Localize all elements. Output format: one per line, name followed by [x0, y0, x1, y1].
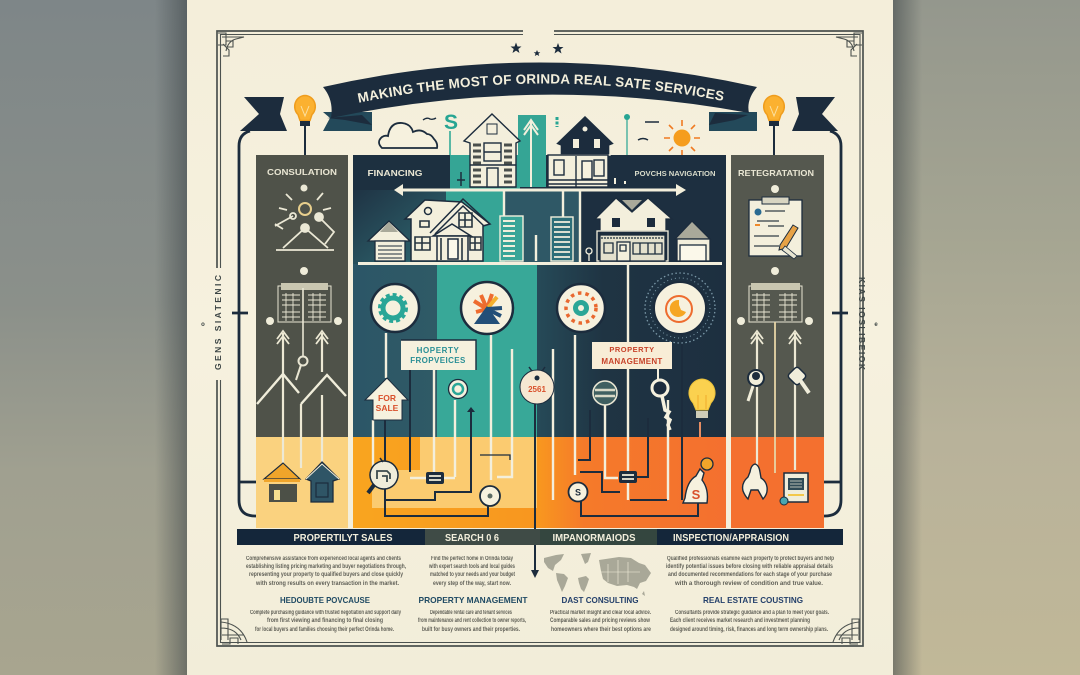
side label left [201, 275, 223, 370]
icon: chip left [426, 472, 444, 484]
sign: property management [592, 342, 672, 369]
bar label: inspection: INSPECTION/APPRAISION [673, 533, 789, 544]
icon: target circle [645, 273, 715, 343]
arrow: horizontal double arrow [394, 184, 686, 196]
side label right: e [874, 322, 878, 328]
right building with arrows [737, 267, 813, 473]
divider bar [358, 262, 722, 265]
icon: striped circle [593, 381, 617, 405]
icon: cloud [379, 123, 437, 148]
icon: s coin [568, 482, 588, 502]
icon: mid left house [405, 199, 490, 261]
text block: inspection: Qualified professionals examine each property to protect buyers and help [667, 556, 834, 562]
icon: teal tower [500, 216, 523, 261]
panel: consultation [256, 155, 348, 528]
icon: plug tag [366, 457, 402, 493]
icon: teal pin [557, 114, 630, 155]
text block: best consulting: homeowners where their best options are [551, 627, 652, 633]
sign: property services: HOPERTY [417, 346, 459, 355]
badge: center date: 2561 [528, 385, 546, 394]
text block: absolute purchase: for local buyers and families choosing their perfect Orinda home. [255, 627, 394, 633]
vertical arrows in teal column [504, 120, 580, 263]
title banner [323, 62, 757, 131]
text block: real estate consulting: Each client receives market research and investment planning [670, 618, 810, 624]
icon: big key [652, 369, 670, 430]
text block: real estate consulting: Consultants provide strategic guidance and a plan to meet your goals. [675, 610, 829, 616]
right banner flag and connector [758, 97, 848, 516]
text block: property management: Dependable rental care and tenant services [430, 610, 512, 616]
panel: retegration [731, 155, 824, 528]
text block: inspection: with a thorough review of condition and true value. [674, 581, 823, 587]
text block: best consulting: Comparable sales and pricing reviews show [550, 618, 650, 624]
panel: central services [353, 155, 726, 528]
text block: real estate consulting: designed around timing, risk, finances and long term ownership plans. [670, 627, 828, 633]
text block: property management: from maintenance and rent collection to owner reports, [418, 618, 526, 624]
icon: left key [296, 356, 308, 380]
side label left: o [201, 322, 205, 328]
connector lines: center cream [373, 265, 668, 500]
label: retegration: RETEGRATATION [738, 168, 814, 178]
icon: money bag: S [692, 487, 701, 502]
icon: birds [423, 118, 659, 140]
label: moving navigation: POVCHS NAVIGATION [634, 171, 716, 178]
text block: search: with expert search tools and local guides [428, 564, 515, 570]
arrow: center vertical [531, 375, 539, 578]
text block: property sales: representing your property to qualified buyers and close quickly [249, 572, 404, 578]
icon: wrench [743, 464, 767, 499]
text block: property sales: Comprehensive assistance from experienced local agents and clients [246, 556, 402, 562]
text block: absolute purchase: from first viewing and financing to final closing [267, 618, 383, 624]
connector lines: center dark [385, 335, 698, 516]
icon: yellow roof house [264, 463, 300, 502]
teal accent column [518, 115, 546, 187]
heading: best consulting: DAST CONSULTING [562, 595, 639, 605]
icon: upper right house [548, 115, 625, 187]
text block: property sales: with strong results on every transaction in the market. [255, 581, 399, 587]
text block: search: every step of the way, start now. [433, 581, 511, 587]
icon: s coin: S [575, 488, 581, 498]
stars [510, 42, 564, 56]
text block: property management [418, 610, 526, 633]
text block: search [428, 556, 515, 587]
text block: absolute purchase [250, 610, 401, 633]
text block: property sales [246, 556, 406, 587]
poster sheet [187, 0, 893, 675]
left banner flag and connector [232, 97, 320, 516]
sign: property services: FROPVEICES [410, 356, 466, 365]
sign: for sale: FOR [378, 393, 396, 403]
heading: property management: PROPERTY MANAGEMENT [418, 595, 528, 605]
icon: bottom ring [480, 486, 500, 506]
side label right [857, 277, 878, 371]
consultation icon [275, 184, 334, 250]
text block: best consulting: Practical market insight and clear local advice. [550, 610, 651, 616]
text block: property management: built for busy owners and their properties. [422, 627, 520, 633]
icon: chip right [619, 471, 637, 483]
blurred background left [0, 0, 188, 675]
icon: dollar marker [444, 111, 458, 156]
text block: property sales: establishing listing pricing marketing and buyer negotiations through, [246, 564, 406, 570]
icon: pinwheel circle [461, 282, 513, 334]
blurred background right [892, 0, 1080, 675]
ornamental frame [217, 31, 863, 646]
icon: dollar marker: S [444, 111, 458, 134]
sign: for sale: SALE [376, 403, 399, 413]
bar label: property sales: PROPERTILYT SALES [294, 533, 393, 544]
icon: lightbulb [689, 379, 715, 437]
text block: inspection: and documented recommendations for each stage of your purchase [668, 572, 833, 578]
text block: inspection [666, 556, 834, 587]
label: financing: FINANCING [368, 168, 423, 178]
icon: money bag [683, 458, 713, 503]
icon: right keys [748, 366, 809, 401]
heading: real estate consulting: REAL ESTATE COUSTING [703, 595, 803, 605]
text block: search: matched to your needs and your budget [430, 572, 515, 578]
icon: right bulb [764, 96, 784, 159]
icon: sunburst circle [557, 284, 605, 332]
text block: inspection: identify potential issues before closing with reliable appraisal details [666, 564, 834, 570]
text block: real estate consulting [670, 610, 829, 633]
bar label: search: SEARCH 0 6 [445, 533, 499, 544]
title: MAKING THE MOST OF ORINDA REAL SATE SERVICES [358, 74, 724, 103]
badge: center date [520, 367, 554, 404]
retegration clipboard icon [749, 185, 802, 259]
icon: left bulb [295, 96, 315, 155]
sign: property management: MANAGEMENT [601, 357, 663, 366]
icon: world map [544, 553, 651, 596]
label: consultation: CONSULATION [267, 167, 337, 177]
sign: property services [401, 340, 476, 370]
side label right: KIAS IOSLIBEIOK [857, 277, 867, 371]
icon: mid right house [586, 198, 710, 261]
heading: absolute purchase: HEDOUBTE POVCAUSE [280, 595, 370, 605]
icon: gear circle [371, 284, 419, 332]
sign: property management: PROPERTY [609, 345, 655, 354]
left building with arrows [257, 267, 346, 468]
icon: small terminal [780, 473, 808, 505]
icon: sun [664, 120, 700, 155]
section header bar [237, 529, 843, 545]
text block: search: Find the perfect home in Orinda today [431, 556, 514, 562]
icon: small ring [448, 380, 468, 398]
icon: mid left garage [368, 221, 410, 261]
sign: for sale [365, 378, 408, 420]
icon: slate tower [551, 217, 573, 261]
bar label: improvements: IMPANORMAIODS [552, 533, 636, 544]
text block: absolute purchase: Complete purchasing guidance with trusted negotiation and support daily [250, 610, 401, 616]
side label left: GENS SIATENIC [213, 275, 223, 370]
icon: blue house [306, 462, 339, 502]
text block: best consulting [550, 610, 652, 633]
icon: upper left house [457, 114, 520, 187]
